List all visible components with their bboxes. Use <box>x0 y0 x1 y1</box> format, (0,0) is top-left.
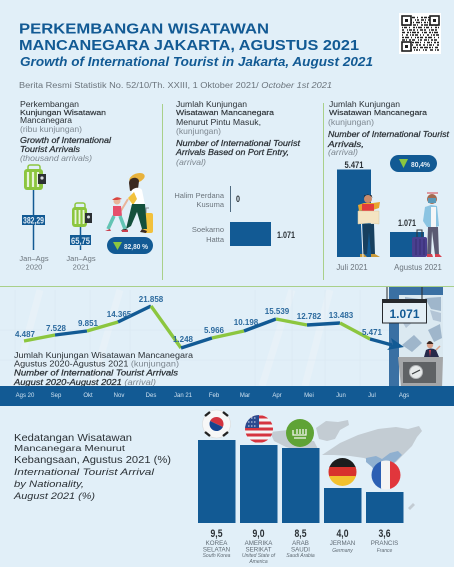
illustration: man reading map <box>358 194 380 257</box>
growth heading: Tourist Arrivals <box>20 144 81 154</box>
nationality heading: August 2021 (%) <box>13 491 95 502</box>
data labels: 10.198 <box>234 318 259 327</box>
data labels: 5.471 <box>362 328 383 337</box>
growth heading: Growth of International <box>20 135 112 145</box>
data labels: 13.483 <box>329 311 354 320</box>
panel: arrivals by port of entry <box>162 99 301 280</box>
month axis band: Apr <box>272 393 282 399</box>
value label 382,29: 382,29 <box>23 216 44 226</box>
lollipop line 2021 <box>80 227 82 250</box>
arrow: chart end <box>387 338 404 350</box>
bar: France: PRANCIS <box>371 540 398 547</box>
illustration: officer <box>424 341 440 357</box>
callout: decrease 82,80 %: 82,80 % <box>124 244 149 251</box>
bar: United States <box>240 445 278 565</box>
month axis band: Ags <box>399 393 409 399</box>
bar: United States: 9,0 <box>252 528 264 540</box>
bar: Soekarno Hatta: Hatta <box>206 235 225 244</box>
bar: United States: SERIKAT <box>245 546 272 554</box>
bar: Saudi Arabia: SAUDI <box>291 546 310 554</box>
port heading: (arrival) <box>176 158 206 167</box>
bar: France: 3,6 <box>378 528 390 540</box>
port heading <box>175 99 301 167</box>
data labels: 4.487 <box>15 330 36 339</box>
callout: decrease 82,80 % <box>107 237 153 254</box>
panel: airport desk <box>389 287 443 386</box>
month axis band: Okt <box>83 393 93 399</box>
month axis band: Ags 20 <box>16 393 35 399</box>
nationality heading: by Nationality, <box>14 479 84 490</box>
title: PERKEMBANGAN WISATAWAN <box>19 22 269 38</box>
bar: Saudi Arabia <box>282 448 320 559</box>
subtitle: Growth of International Tourist in Jakarta, August 2021 <box>20 54 373 69</box>
panel: monthly comparison <box>324 99 450 280</box>
month axis band: Jul <box>368 393 376 399</box>
nationality heading: International Tourist Arrival <box>14 467 155 478</box>
month axis band: Nov <box>114 393 124 399</box>
port heading: Wisatawan Mancanegara <box>176 108 275 117</box>
bar: Agustus 2021 <box>390 218 442 272</box>
period labels: Jan–Ags <box>19 254 49 263</box>
icon: flag Germany <box>328 458 357 486</box>
growth heading: (thousand arrivals) <box>20 154 92 163</box>
bar: Germany: Germany <box>332 548 353 554</box>
panel: arrivals by nationality <box>13 410 422 565</box>
month axis band <box>0 386 454 406</box>
panel: monthly trend <box>0 286 454 406</box>
icon: suitcase 2020 <box>24 165 46 190</box>
period labels <box>19 254 96 272</box>
bar: France <box>366 492 404 554</box>
port heading: (kunjungan) <box>176 127 221 136</box>
bar: Juli 2021 <box>336 160 371 272</box>
bar: South Korea: 9,5 <box>210 528 222 540</box>
growth heading: (ribu kunjungan) <box>20 125 82 134</box>
bar: Soekarno Hatta <box>192 222 296 246</box>
bar: France: France <box>377 548 392 554</box>
data labels: 1.248 <box>173 335 194 344</box>
month axis band: Mei <box>304 393 314 399</box>
growth heading: Mancanegara <box>20 115 72 125</box>
monthly heading: Wisatawan Mancanegara <box>329 108 428 117</box>
bar: South Korea: South Korea <box>203 553 231 559</box>
data labels: 21.858 <box>139 295 164 304</box>
bar: Juli 2021: Juli 2021 <box>336 263 368 272</box>
bar: Halim Perdana Kusuma: 0 <box>236 194 240 205</box>
bar: South Korea <box>198 440 236 559</box>
month axis band: Feb <box>209 393 220 399</box>
bar: Juli 2021: 5.471 <box>344 160 364 171</box>
month axis band: Sep <box>51 393 62 399</box>
illustration: desk with clock <box>398 357 443 386</box>
map highlight: Southeast Asia <box>366 451 402 475</box>
bar: Soekarno Hatta: Soekarno <box>192 225 224 234</box>
monthly heading: (arrival) <box>328 148 358 157</box>
bar: Halim Perdana Kusuma <box>174 186 240 212</box>
value label 65,75: 65,75 <box>71 236 91 247</box>
bar: Halim Perdana Kusuma: Kusuma <box>196 200 225 209</box>
period labels: 2020 <box>26 262 42 272</box>
icon: suitcase 2021 <box>72 203 92 227</box>
nationality heading: Kedatangan Wisatawan <box>14 433 132 444</box>
monthly heading: Arrivals, <box>327 139 364 149</box>
data labels: 15.539 <box>265 307 290 316</box>
trend caption: Agustus 2020-Agustus 2021 (kunjungan) <box>14 358 179 368</box>
title: MANCANEGARA JAKARTA, AGUSTUS 2021 <box>19 38 359 54</box>
world map backdrop <box>270 420 422 510</box>
bar: United States: United State of <box>242 553 276 559</box>
bar: Agustus 2021: 1.071 <box>398 218 417 229</box>
illustration: woman and child with suitcase <box>105 171 153 233</box>
icon: flag South Korea <box>202 410 230 438</box>
trend caption <box>13 350 193 387</box>
bar: South Korea: KOREA <box>206 540 228 547</box>
monthly heading: Number of International Tourist <box>328 129 450 139</box>
month axis band: Des <box>146 393 156 399</box>
trend caption: Number of International Tourist Arrivals <box>14 368 179 378</box>
illustration: man with suitcase <box>412 192 442 257</box>
data labels: 12.782 <box>297 312 322 321</box>
bar: Saudi Arabia: 8,5 <box>294 528 306 540</box>
line chart <box>24 306 392 348</box>
month axis band: Jun <box>336 393 346 399</box>
panel: growth of arrivals <box>19 99 153 272</box>
bar: Germany: JERMAN <box>330 540 355 547</box>
bar: South Korea: SELATAN <box>203 546 230 554</box>
nationality heading: Mancanegara Menurut <box>14 444 126 453</box>
bar: Saudi Arabia: ARAB <box>292 540 309 547</box>
callout: decrease 80,4%: 80,4% <box>411 160 430 169</box>
data labels: 14.365 <box>107 310 132 319</box>
bar: United States: America <box>248 559 268 565</box>
nationality heading: Kebangsaan, Agustus 2021 (%) <box>14 455 171 466</box>
publication reference: Berita Resmi Statistik No. 52/10/Th. XXIII, 1 Oktober 2021/ October 1st 2021 <box>19 81 332 90</box>
bar: Germany <box>324 488 362 554</box>
icon: flag France <box>371 460 401 490</box>
port heading: Menurut Pintu Masuk, <box>176 117 261 127</box>
port heading: Jumlah Kunjungan <box>176 99 247 109</box>
port heading: Arrivals Based on Port Entry, <box>175 147 289 157</box>
port heading: Number of International Tourist <box>176 138 301 148</box>
bar: United States: AMERIKA <box>245 540 273 547</box>
icon: flag Saudi Arabia <box>286 419 314 447</box>
callout: decrease 80,4% <box>390 155 437 172</box>
data labels: 9.851 <box>78 319 99 328</box>
bar: Saudi Arabia: Saudi Arabia <box>286 553 315 559</box>
monthly heading: Jumlah Kunjungan <box>329 99 400 109</box>
icon: flag United States <box>245 415 273 443</box>
title <box>19 22 359 54</box>
callout: August value sign <box>382 287 427 323</box>
bar: Agustus 2021: Agustus 2021 <box>394 263 442 272</box>
month axis band: Mar <box>240 393 250 399</box>
bar: Halim Perdana Kusuma: Halim Perdana <box>174 191 225 200</box>
growth heading: Kunjungan Wisatawan <box>20 108 106 117</box>
data labels: 5.966 <box>204 326 225 335</box>
trend caption: August 2020-August 2021 (arrival) <box>13 377 156 387</box>
monthly heading: (kunjungan) <box>328 118 374 127</box>
growth heading <box>20 99 112 163</box>
lollipop line 2020 <box>32 190 34 250</box>
trend caption: Jumlah Kunjungan Wisatawan Mancanegara <box>14 350 193 360</box>
callout: August value sign: 1.071 <box>390 309 420 321</box>
data labels <box>15 295 383 344</box>
icon: QR code <box>399 13 441 54</box>
bar: Germany: 4,0 <box>336 528 348 540</box>
monthly heading <box>327 99 450 157</box>
month axis band: Jan 21 <box>174 393 193 399</box>
data labels: 7.528 <box>46 324 67 333</box>
period labels: Jan–Ags <box>66 254 96 263</box>
period labels: 2021 <box>73 262 89 272</box>
growth heading: Perkembangan <box>20 99 79 109</box>
nationality heading <box>13 433 171 502</box>
bar: Soekarno Hatta: 1.071 <box>277 230 296 241</box>
